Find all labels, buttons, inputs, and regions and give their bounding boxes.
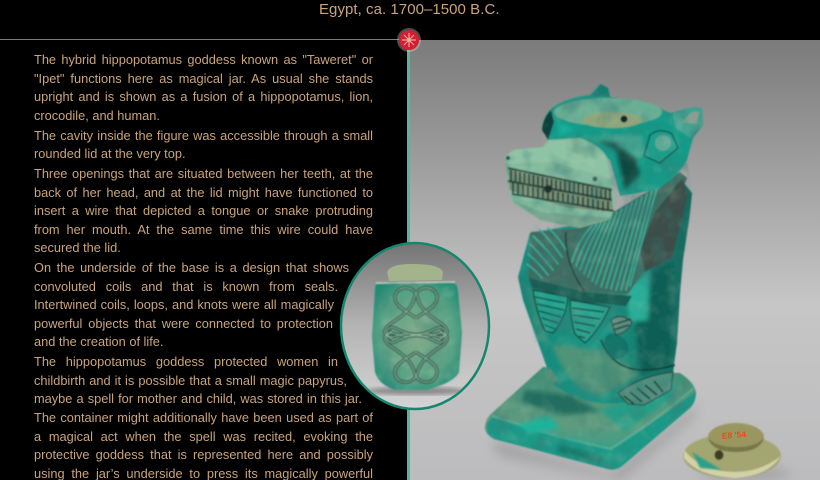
hand [611, 316, 632, 335]
paragraph: three openings: from her mouth. At the same time this wire could have [34, 222, 373, 237]
paragraph: protection of women: childbirth and it is possible that a small magic papyrus, [34, 373, 347, 388]
head [542, 84, 703, 196]
paragraph: underside design: powerful objects that were connected to protection [34, 316, 333, 331]
paragraph: cavity [34, 128, 373, 161]
paragraph: cavity: rounded lid at the very top. [34, 146, 186, 161]
paragraph: three openings: back of her head, and at the lid might have functioned to [34, 185, 373, 200]
paragraph: underside design: On the underside of the base is a design that shows [34, 260, 349, 275]
inset photo: jar underside [340, 242, 490, 410]
paragraph: underside design: and the creation of life. [34, 334, 163, 349]
paragraph: Taweret introduction: upright and is shown as a fusion of a hippopotamus, lion, [34, 89, 373, 104]
paragraph: Taweret introduction [34, 52, 373, 123]
lid [683, 423, 781, 478]
paragraph: Taweret introduction: "Ipet" functions here as magical jar. As usual she stands [34, 71, 373, 86]
knot design [385, 288, 447, 382]
paragraph: three openings: insert a wire that depicted a tongue or snake protruding [34, 203, 373, 218]
paragraph: magical act: protective goddess that is represented here and possibly [34, 447, 373, 462]
rosette ornament [397, 28, 421, 52]
text block: description: secured the lid. [34, 240, 121, 255]
jar lid knob [387, 264, 443, 281]
base [485, 367, 696, 470]
photo: Taweret jar with lid [410, 40, 820, 480]
paragraph: protection of women: The hippopotamus goddess protected women in [34, 354, 338, 369]
text block: description [34, 52, 373, 480]
snout with teeth [505, 138, 615, 228]
paragraph: magical act: a magical act when the spell was recited, evoking the [34, 429, 373, 444]
chest with stripes [528, 172, 687, 294]
feet [618, 372, 673, 405]
paragraph: protection of women [34, 354, 362, 406]
paragraph: underside design: Intertwined coils, loops, and knots were all magically [34, 297, 334, 312]
paragraph: magical act: The container might additionally have been used as part of [34, 410, 373, 425]
jar body [370, 280, 465, 392]
paragraph: underside design: convoluted coils and that is known from seals. [34, 279, 338, 294]
paragraph: underside design [34, 260, 349, 349]
paragraph: Taweret introduction: The hybrid hippopotamus goddess known as "Taweret" or [34, 52, 373, 67]
paragraph: three openings: Three openings that are situated between her teeth, at the [34, 166, 373, 181]
vertical teal divider [407, 42, 410, 480]
lid inventory mark: E8 '54 [721, 429, 747, 441]
paragraph: magical act [34, 410, 373, 480]
waist band and pendulous breasts [529, 278, 632, 306]
paragraph: protection of women: maybe a spell for mother and child, was stored in this jar. [34, 391, 362, 406]
paragraph: three openings [34, 166, 373, 255]
header rule [0, 39, 402, 40]
glaze mottling [480, 80, 710, 475]
cast shadows [490, 402, 791, 480]
torso and arm [518, 178, 692, 404]
paragraph: cavity: The cavity inside the figure was accessible through a small [34, 128, 373, 143]
paragraph: Taweret introduction: crocodile, and human. [34, 108, 160, 123]
subtitle heading: Egypt, ca. 1700–1500 B.C. [319, 1, 500, 18]
figure: hippopotamus goddess [480, 80, 710, 475]
